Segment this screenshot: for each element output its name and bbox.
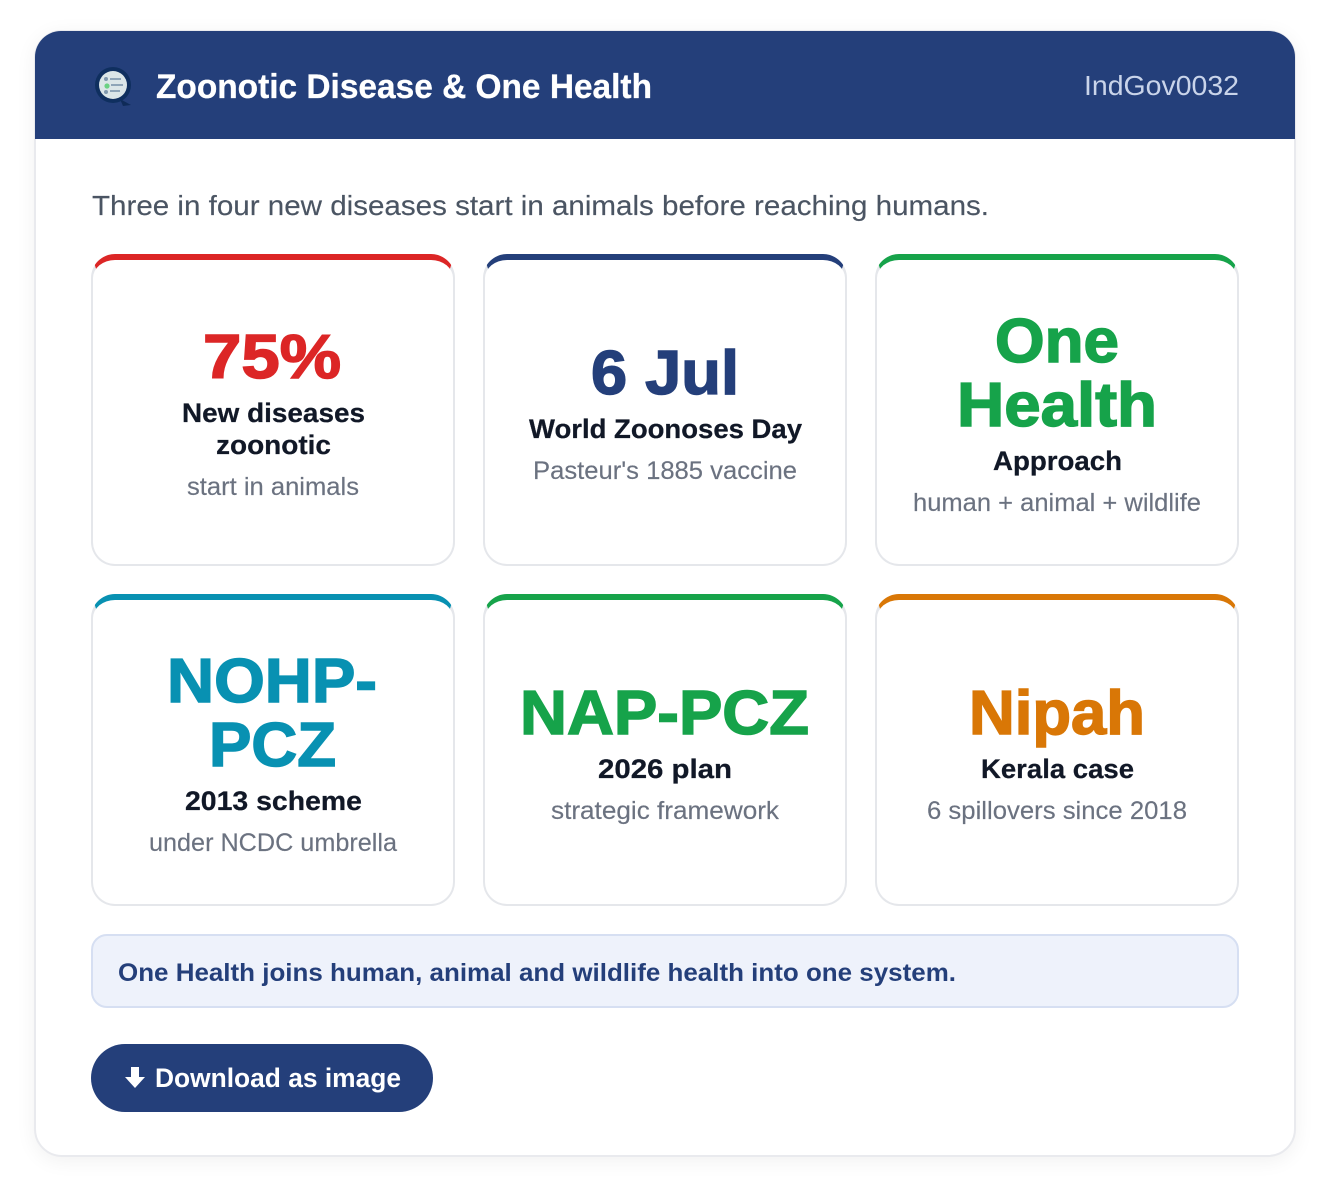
title: Zoonotic Disease & One Health: [156, 68, 652, 106]
stat: Nipah: Nipah: [969, 679, 1145, 748]
note: under NCDC umbrella: [149, 829, 397, 857]
label: World Zoonoses Day: [529, 414, 802, 444]
label: Approach: [993, 446, 1122, 476]
stat: NOHP-PCZ: PCZ: [209, 711, 336, 780]
stat: NAP-PCZ: NAP-PCZ: [520, 679, 809, 748]
panel: One Health: [875, 254, 1239, 566]
stat: 75%: 75%: [203, 323, 341, 392]
panel: NOHP-PCZ: [91, 594, 455, 906]
stat: One Health: Health: [957, 371, 1157, 440]
header band: [35, 31, 1295, 139]
label: new diseases zoonotic: [182, 398, 365, 460]
panel: 75% new diseases: [91, 254, 455, 566]
label: new diseases zoonotic: New diseases: [182, 398, 365, 428]
button label: Download as image: [155, 1063, 401, 1093]
stat: 6 Jul: 6 Jul: [591, 339, 739, 408]
stat: One Health: One: [995, 307, 1119, 376]
note: strategic framework: [551, 797, 780, 825]
panel: World Zoonoses Day: [483, 254, 847, 566]
label: Kerala case: [981, 754, 1134, 784]
note: 6 spillovers since 2018: [927, 797, 1187, 825]
intro text: Three in four new diseases start in animals before reaching humans.: [92, 190, 989, 221]
stat: NOHP-PCZ: NOHP-: [167, 647, 377, 716]
note: start in animals: [187, 473, 359, 501]
panel: NAP-PCZ: [483, 594, 847, 906]
panel: Nipah: [875, 594, 1239, 906]
label: new diseases zoonotic: zoonotic: [216, 430, 331, 460]
report code: IndGov0032: [1084, 70, 1239, 101]
icon: download arrow: [125, 1067, 145, 1088]
label: 2026 plan: [598, 754, 732, 784]
button: download as image: [91, 1044, 433, 1112]
label: 2013 scheme: [185, 786, 362, 816]
callout: One Health joins human, animal and wildlife health into one system.: [118, 959, 956, 987]
note: human + animal + wildlife: [913, 489, 1201, 517]
stat: NOHP-PCZ: [167, 647, 377, 780]
note: Pasteur's 1885 vaccine: [533, 457, 797, 485]
callout: [91, 934, 1239, 1008]
stat: One Health: [957, 307, 1157, 440]
icon: magnifier logo: [95, 67, 131, 106]
